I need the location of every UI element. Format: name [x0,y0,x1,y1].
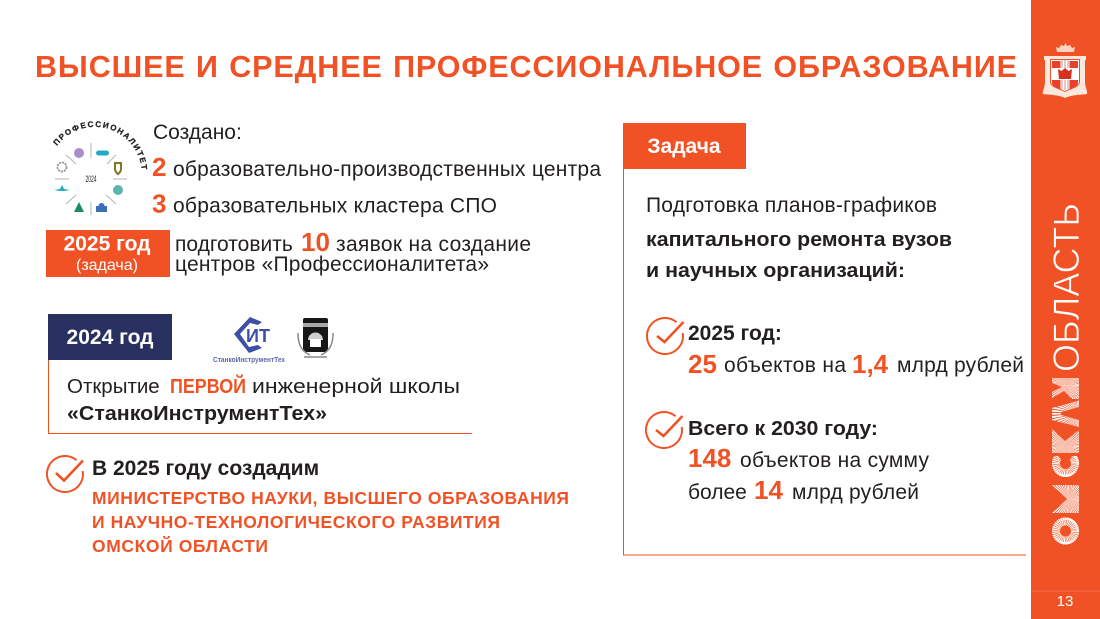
text block: prepare applications: центров «Профессионалитета» [175,253,489,276]
text: 2030 objects [688,417,930,505]
badge: 2025 год (задача): 2025 год [64,232,150,256]
text block: ministry: МИНИСТЕРСТВО НАУКИ, ВЫСШЕГО ОБРАЗОВАНИЯ [92,488,569,508]
text block: created: образовательных кластера СПО [173,194,497,218]
title: ВЫСШЕЕ И СРЕДНЕЕ ПРОФЕССИОНАЛЬНОЕ ОБРАЗОВАНИЕ [35,50,1017,84]
panel: 2024 engineering school: 2024 год [67,326,153,349]
panel: 2024 engineering school [48,314,472,434]
text: 2025 objects: 2025 год: [688,322,782,345]
icon: check 2025 [647,318,684,354]
text: task description: и научных организаций: [646,259,905,282]
text block: ministry: В 2025 году создадим [92,457,319,480]
text: task description: капитального ремонта вузов [646,228,952,251]
icon: check 2030 [646,412,682,448]
page number: 13 [1057,593,1073,610]
text: 2030 objects: 148 [688,443,731,473]
logo: Профессионалитет [52,121,148,215]
text block: ministry [92,457,569,556]
badge: Задача [623,123,746,169]
logo: city crest [298,318,333,357]
icon: regional coat of arms [1043,43,1087,98]
text block: prepare applications: заявок на создание [336,233,531,256]
text block: prepare applications: 10 [301,227,330,257]
logo: Профессионалитет: 2024 [86,174,96,184]
brand letters: ОМСКАЯ sunburst [1052,378,1080,544]
text: 2030 objects: объектов на сумму [740,449,930,472]
panel: 2024 engineering school: инженерной школы [252,375,460,398]
text: 2030 objects: Всего к 2030 году: [688,417,878,440]
logo: СтанкоИнструментТех: ИТ [246,326,270,346]
text: 2025 objects: млрд рублей [897,354,1024,377]
text: 2030 objects: млрд рублей [792,481,919,504]
text block: created: Создано: [153,121,242,144]
text block: prepare applications: подготовить [175,233,293,256]
text block: created: 2 [152,152,166,182]
badge: 2025 год (задача) [46,230,170,277]
text: task description [646,194,952,282]
text block: created [152,121,601,218]
text: 2025 objects: объектов на [724,354,846,377]
sidebar [1031,0,1100,619]
logo: СтанкоИнструментТех [213,317,286,364]
logo: Профессионалитет: ПРОФЕССИОНАЛИТЕТ [52,121,148,170]
text: 2025 objects: 1,4 [852,349,889,379]
text: 2030 objects: более [688,481,747,504]
panel: 2024 engineering school: ПЕРВОЙ [170,374,246,398]
text: 2025 objects [688,322,1024,379]
text block: prepare applications [175,227,531,276]
text: 2030 objects: 14 [754,475,783,505]
badge: Задача: Задача [647,135,721,158]
logo: СтанкоИнструментТех: СтанкоИнструментТех [213,355,286,364]
badge: 2025 год (задача): (задача) [76,257,138,274]
brand text: ОБЛАСТЬ: ОБЛАСТЬ [1046,203,1087,372]
text: 2025 objects: 25 [688,349,717,379]
icon: check left [47,456,83,492]
text: task description: Подготовка планов-графиков [646,194,937,217]
text: first engineering school: Открытие [67,375,160,398]
text block: created: образовательно-производственных центра [173,158,601,181]
panel: 2024 engineering school: «СтанкоИнструментТех» [67,402,327,425]
text block: ministry: И НАУЧНО-ТЕХНОЛОГИЧЕСКОГО РАЗВИТИЯ [92,512,500,532]
text block: ministry: ОМСКОЙ ОБЛАСТИ [92,535,268,556]
text block: created: 3 [152,188,166,218]
panel: task [623,123,1026,555]
